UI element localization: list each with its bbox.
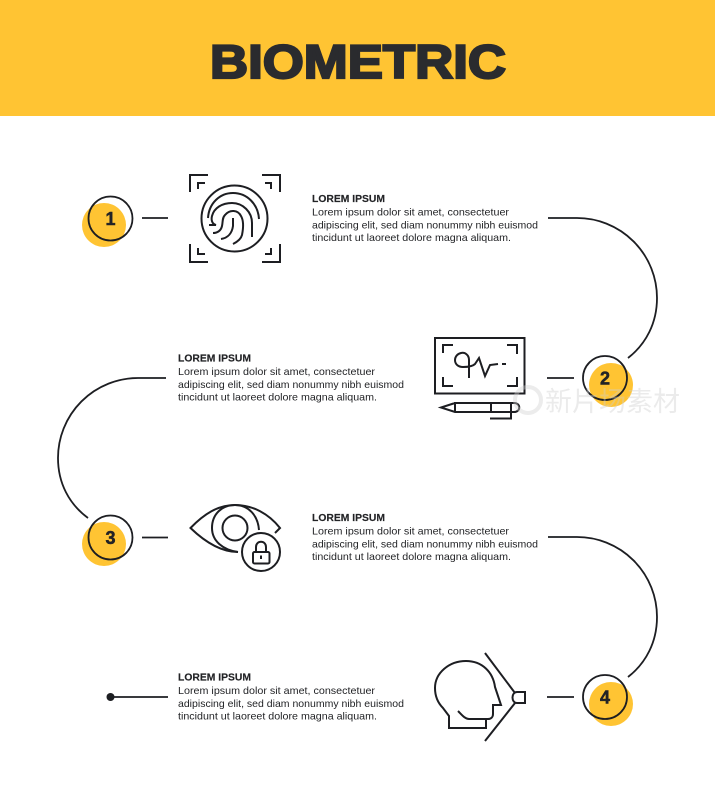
text block 1: LOREM IPSUM [312, 193, 385, 205]
step 2 badge: 2 [600, 368, 610, 388]
step 4 connector [547, 696, 574, 698]
end marker: dot and line [106, 693, 168, 701]
step 3 badge: 3 [105, 528, 116, 548]
text block 4: LOREM IPSUM [178, 672, 251, 684]
text block 3: LOREM IPSUM [312, 512, 385, 524]
watermark: 新片场素材 [545, 387, 680, 417]
step 1 badge: 1 [105, 209, 116, 229]
icon: eye with padlock [190, 505, 280, 571]
step 3 connector [142, 536, 168, 538]
text block 4: adipiscing elit, sed diam nonummy nibh euismod [178, 698, 404, 710]
text block 3: adipiscing elit, sed diam nonummy nibh euismod [312, 538, 538, 550]
text block 2: Lorem ipsum dolor sit amet, consectetuer [178, 366, 376, 378]
text block 4: tincidunt ut laoreet dolore magna aliquam. [178, 710, 377, 722]
text block 2: tincidunt ut laoreet dolore magna aliquam. [178, 392, 377, 404]
text block 2: LOREM IPSUM [178, 352, 251, 364]
step 4 badge: 4 [600, 688, 610, 708]
step 1 badge [82, 196, 132, 247]
step 2 connector [547, 377, 574, 379]
icon: fingerprint scan [190, 175, 280, 262]
text block 4 [178, 672, 404, 722]
step 3 badge [82, 516, 132, 566]
text block 4: Lorem ipsum dolor sit amet, consectetuer [178, 685, 376, 697]
connector curve: step 2 to step 3 [58, 378, 166, 518]
icon: face recognition head and camera [435, 653, 525, 741]
text block 2 [178, 352, 404, 404]
connector curve: step 3 to step 4 [548, 537, 657, 677]
header band [0, 0, 715, 116]
text block 1: adipiscing elit, sed diam nonummy nibh euismod [312, 220, 538, 232]
step 4 badge [583, 675, 633, 726]
connector curve: step 1 to step 2 [548, 218, 657, 358]
text block 3: tincidunt ut laoreet dolore magna aliquam. [312, 551, 511, 563]
text block 3 [312, 512, 538, 563]
text block 3: Lorem ipsum dolor sit amet, consectetuer [312, 526, 510, 538]
text block 1: Lorem ipsum dolor sit amet, consectetuer [312, 206, 510, 218]
title: BIOMETRIC [210, 35, 506, 88]
text block 1: tincidunt ut laoreet dolore magna aliquam. [312, 232, 511, 244]
step 2 badge [583, 356, 633, 407]
step 1 connector [142, 217, 168, 219]
text block 2: adipiscing elit, sed diam nonummy nibh euismod [178, 379, 404, 391]
icon: signature tablet and pen [435, 338, 524, 418]
text block 1 [312, 193, 538, 244]
